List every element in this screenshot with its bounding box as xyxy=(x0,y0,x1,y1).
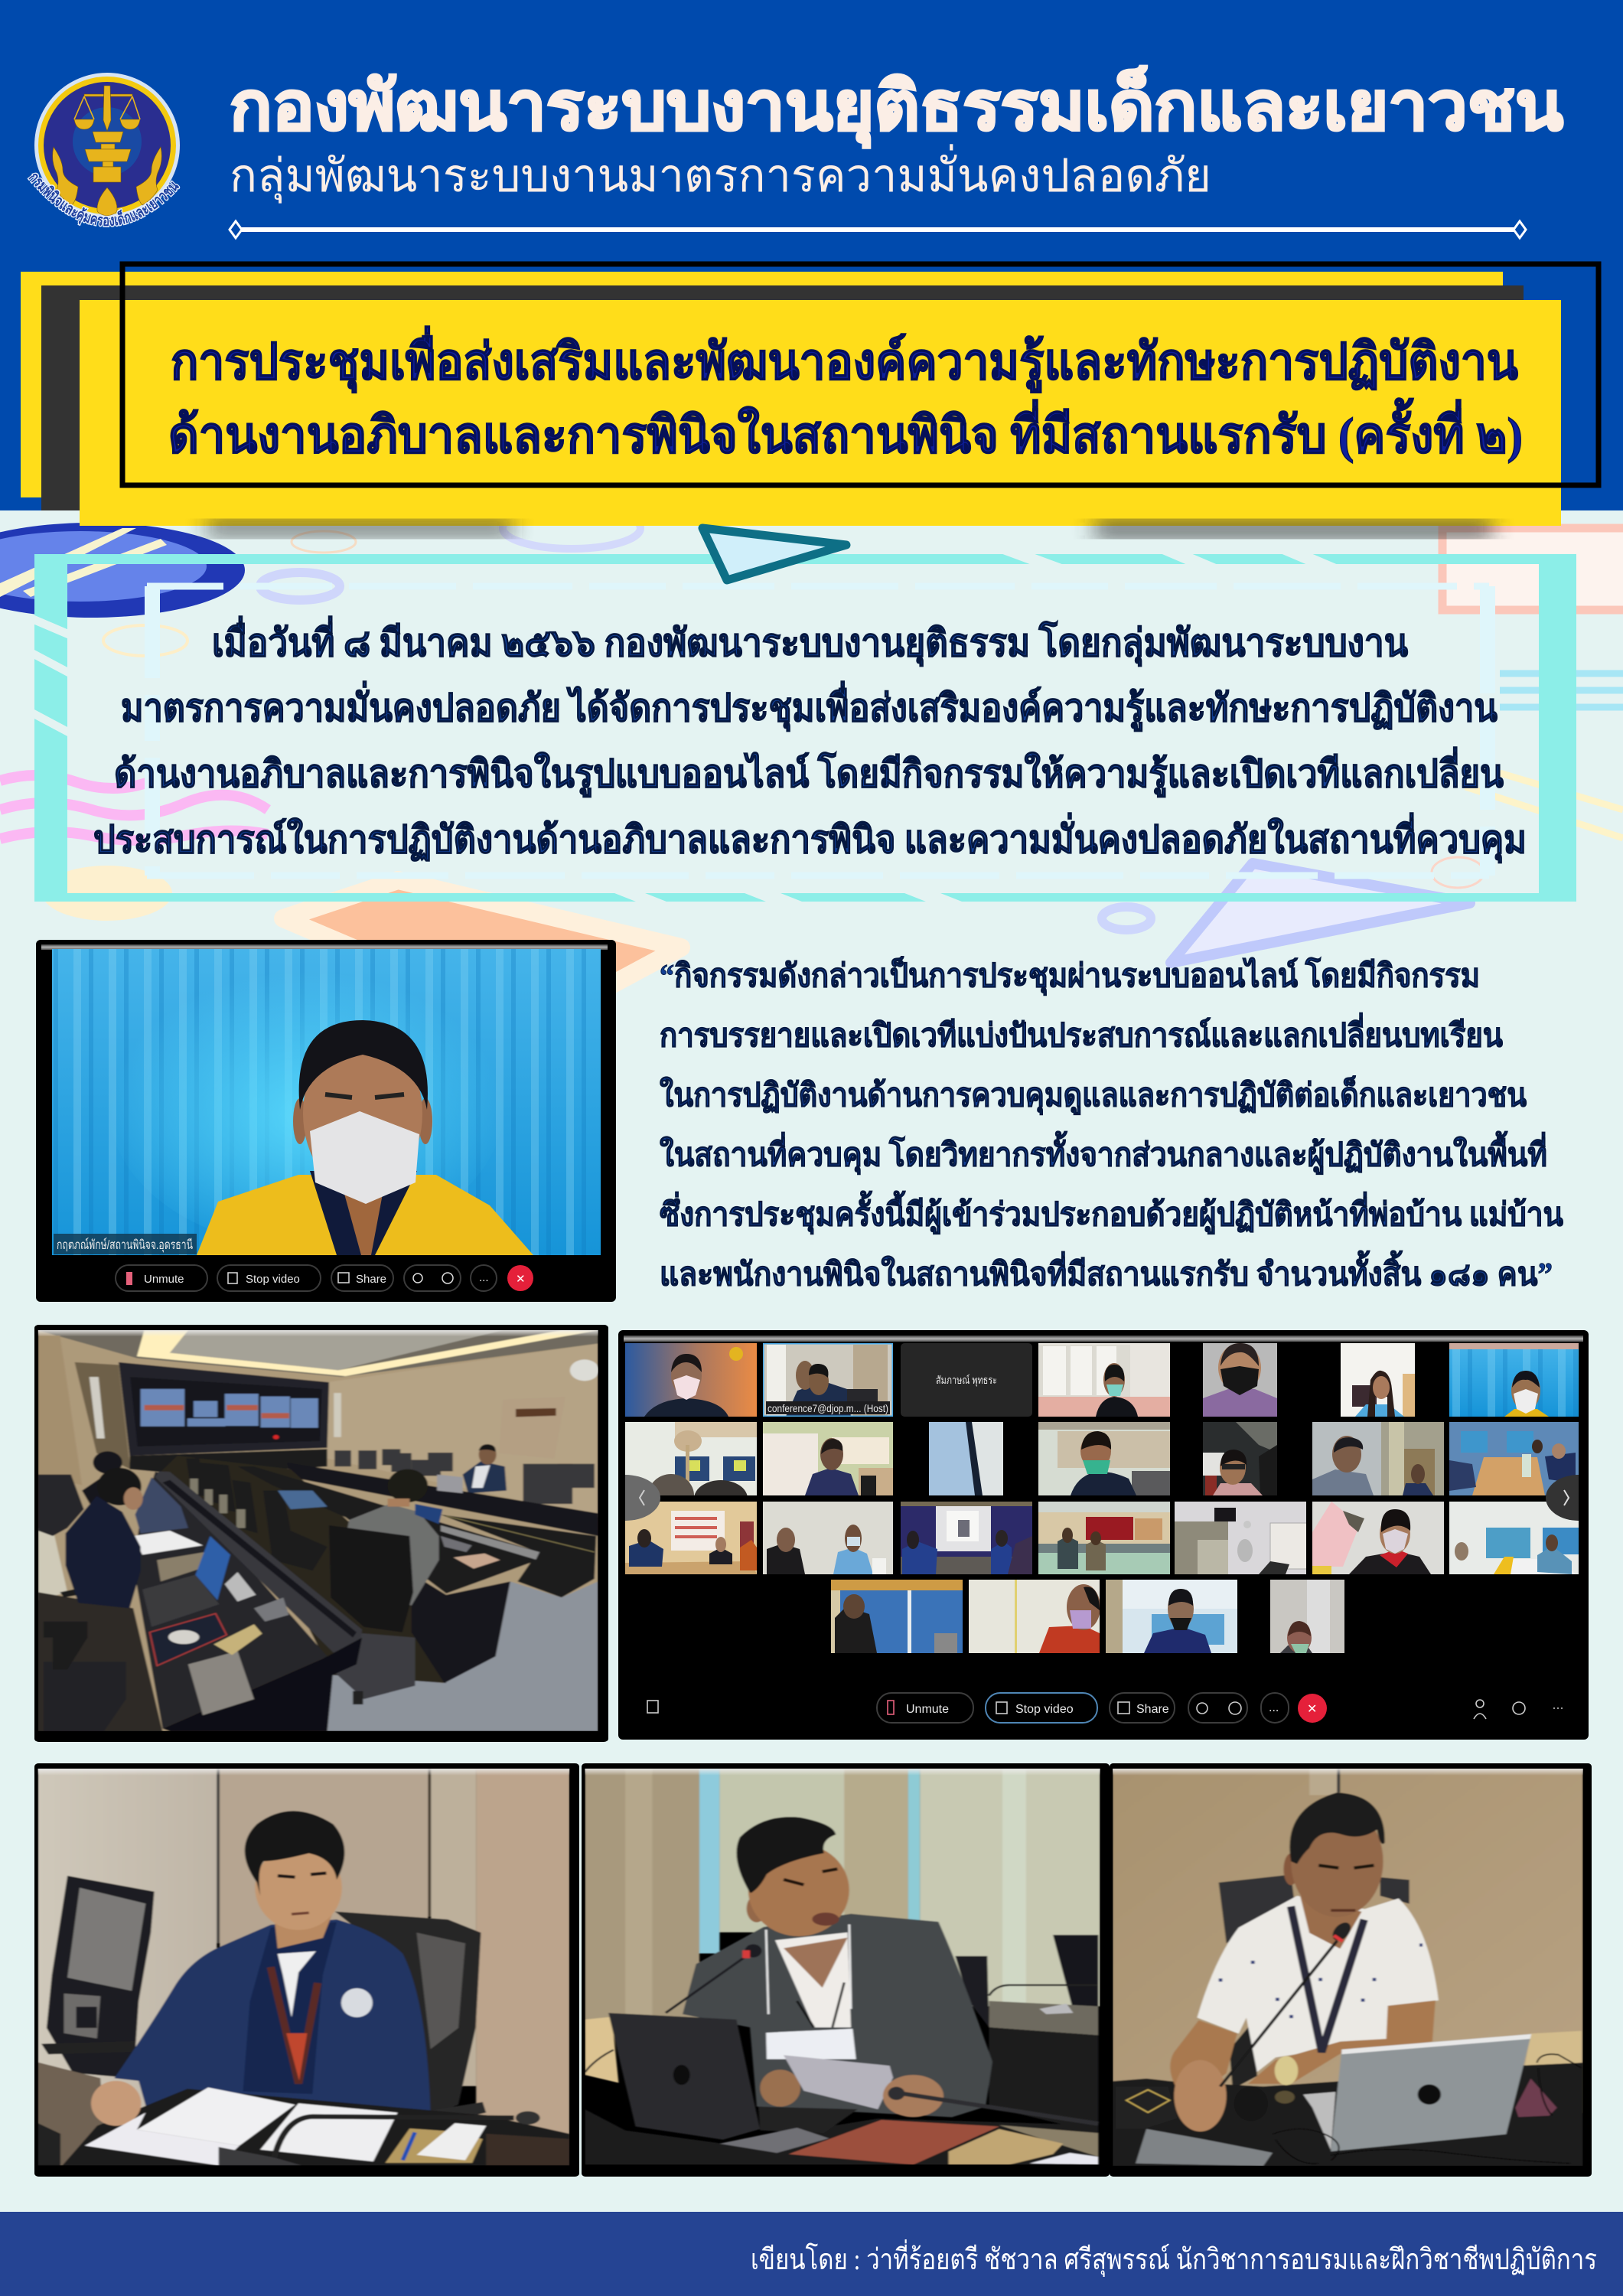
title banner xyxy=(21,264,1599,526)
quote text block xyxy=(660,956,1563,1293)
photo: video-call gallery xyxy=(618,1330,1589,1740)
decorative triangle over frame xyxy=(702,528,846,580)
meeting toolbar xyxy=(116,1265,533,1291)
header divider xyxy=(230,221,1526,238)
meeting toolbar: ✕ xyxy=(1307,1703,1317,1716)
gallery row 1 xyxy=(625,1343,1579,1417)
meeting toolbar: Stop video xyxy=(1015,1703,1074,1716)
intro text block xyxy=(93,616,1527,863)
quote text block: “กิจกรรมดังกล่าวเป็นการประชุมผ่านระบบออนไลน์ โดยมีกิจกรรม xyxy=(660,956,1480,996)
gallery row 1: สัมภาษณ์ พุทธระ xyxy=(936,1374,997,1387)
banner title text: ด้านงานอภิบาลและการพินิจในสถานพินิจ ที่มีสถานแรกรับ (ครั้งที่ ๒) xyxy=(168,397,1523,464)
meeting toolbar: ... xyxy=(1269,1701,1279,1714)
meeting toolbar: Share xyxy=(1136,1703,1169,1716)
panel: intro text frame xyxy=(33,553,1576,903)
photo: online participant on blue curtain: กฤตภณ์พักษ์/สถานพินิจจ.อุดรธานี xyxy=(57,1238,193,1253)
photo: online participant on blue curtain: Unmute xyxy=(144,1273,184,1286)
photo: online participant on blue curtain: ... xyxy=(479,1271,489,1284)
banner title text: การประชุมเพื่อส่งเสริมและพัฒนาองค์ความรู้และทักษะการปฏิบัติงาน xyxy=(171,325,1518,393)
quote text block: และพนักงานพินิจในสถานพินิจที่มีสถานแรกรับ จำนวนทั้งสิ้น ๑๘๑ คน” xyxy=(660,1250,1553,1293)
gallery row 3 xyxy=(625,1502,1579,1574)
photo: online participant on blue curtain: Stop video xyxy=(246,1273,300,1286)
shadow under banner xyxy=(207,520,1492,537)
photo: conference room xyxy=(34,1325,608,1742)
logo: department seal: กรมพินิจและคุ้มครองเด็กและเยาวชน xyxy=(28,173,181,227)
intro text block: เมื่อวันที่ ๘ มีนาคม ๒๕๖๖ กองพัฒนาระบบงานยุติธรรม โดยกลุ่มพัฒนาระบบงาน xyxy=(212,616,1408,667)
gallery row 2 xyxy=(625,1422,1579,1517)
quote text block: ในสถานที่ควบคุม โดยวิทยากรทั้งจากส่วนกลางและผู้ปฏิบัติงานในพื้นที่ xyxy=(660,1130,1547,1175)
photo: online participant on blue curtain xyxy=(36,940,616,1302)
heading: department name: กองพัฒนาระบบงานยุติธรรมเด็กและเยาวชน xyxy=(230,65,1563,148)
subheading: division name: กลุ่มพัฒนาระบบงานมาตรการความมั่นคงปลอดภัย xyxy=(230,144,1211,204)
logo: department seal xyxy=(28,73,181,227)
intro text block: ด้านงานอภิบาลและการพินิจในรูปแบบออนไลน์ โดยมีกิจกรรมให้ความรู้และเปิดเวทีแลกเปลี่ยน xyxy=(114,747,1504,797)
intro text block: มาตรการความมั่นคงปลอดภัย ได้จัดการประชุมเพื่อส่งเสริมองค์ความรู้และทักษะการปฏิบัติงาน xyxy=(121,681,1498,732)
photo: online participant on blue curtain: ✕ xyxy=(516,1273,526,1286)
photo: speaker in grey jacket xyxy=(582,1763,1110,2177)
decorative background shapes xyxy=(0,507,1623,1026)
footer band xyxy=(0,2212,1623,2296)
photo: online participant on blue curtain: Share xyxy=(356,1273,386,1286)
photo: speaker in white shirt xyxy=(1110,1763,1592,2177)
gallery navigation arrows xyxy=(625,1475,1579,1521)
photo: speaker in navy jacket xyxy=(34,1763,579,2177)
quote text block: ในการปฏิบัติงานด้านการควบคุมดูแลและการปฏิบัติต่อเด็กและเยาวชน xyxy=(660,1075,1527,1115)
meeting toolbar xyxy=(647,1693,1563,1723)
quote text block: ซึ่งการประชุมครั้งนี้มีผู้เข้าร่วมประกอบด้วยผู้ปฏิบัติหน้าที่พ่อบ้าน แม่บ้าน xyxy=(660,1190,1563,1234)
quote text block: การบรรยายและเปิดเวทีแบ่งปันประสบการณ์และแลกเปลี่ยนบทเรียน xyxy=(660,1013,1503,1054)
banner title text xyxy=(168,325,1523,464)
meeting toolbar: Unmute xyxy=(906,1703,949,1716)
gallery row 4 xyxy=(831,1580,1374,1653)
header band xyxy=(0,0,1623,510)
